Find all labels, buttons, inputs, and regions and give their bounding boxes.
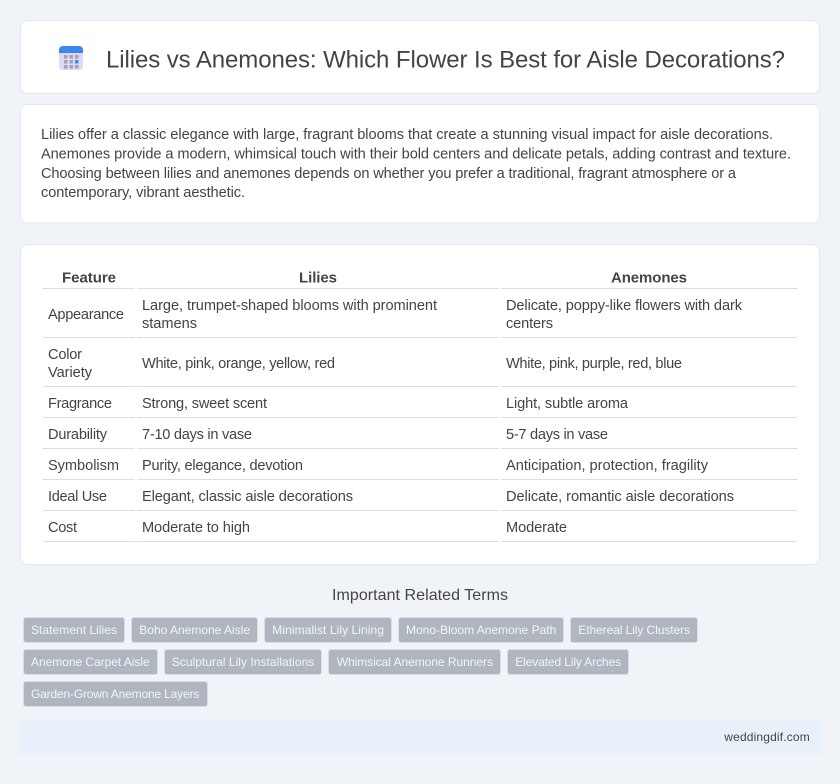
row: appearance: stamens: [142, 316, 197, 332]
row: ideal use: Delicate, romantic aisle decorations: [506, 489, 734, 505]
row: ideal use: Ideal Use: [48, 489, 107, 505]
tag: boho anemone aisle: [132, 618, 258, 642]
row: appearance: [48, 298, 743, 332]
row: cost: Moderate: [506, 520, 567, 536]
title: Lilies vs Anemones: Which Flower Is Best for Aisle Decorations?: [106, 46, 785, 74]
row: ideal use: Elegant, classic aisle decorations: [142, 489, 353, 505]
panel: header: [20, 20, 820, 94]
row: durability: 5-7 days in vase: [506, 427, 608, 443]
tag: mono-bloom anemone path: [398, 618, 564, 642]
tag: statement lilies: Statement Lilies: [31, 623, 117, 637]
row: color variety: [48, 347, 682, 381]
row: durability: Durability: [48, 427, 108, 443]
tag: minimalist lily lining: [264, 618, 392, 642]
row: durability: [48, 427, 608, 443]
panel: introduction text: Choosing between lilies and anemones depends on whether you prefer a traditional, fragrant atmosphere or a: [41, 166, 737, 182]
row: cost: Cost: [48, 520, 77, 536]
row: fragrance: Strong, sweet scent: [142, 396, 267, 412]
row: symbolism: Purity, elegance, devotion: [142, 458, 303, 474]
row: ideal use: [48, 489, 734, 505]
heading: important related terms: Important Related Terms: [332, 587, 508, 604]
tag: elevated lily arches: Elevated Lily Arches: [515, 655, 621, 669]
row: cost: Moderate to high: [142, 520, 250, 536]
tag: ethereal lily clusters: Ethereal Lily Clusters: [578, 623, 690, 637]
row: durability: 7-10 days in vase: [142, 427, 252, 443]
tag: minimalist lily lining: Minimalist Lily Lining: [272, 623, 384, 637]
row: appearance: Large, trumpet-shaped blooms with prominent: [142, 298, 437, 314]
icon: calendar: [59, 46, 83, 70]
table header row: [62, 270, 687, 286]
row: symbolism: [48, 458, 709, 474]
table header row: Anemones: [611, 270, 687, 286]
tag: sculptural lily installations: [164, 650, 322, 674]
tag: whimsical anemone runners: Whimsical Anemone Runners: [337, 655, 493, 669]
tag: boho anemone aisle: Boho Anemone Aisle: [139, 623, 250, 637]
row: fragrance: Fragrance: [48, 396, 112, 412]
row: fragrance: Light, subtle aroma: [506, 396, 629, 412]
row: appearance: Delicate, poppy-like flowers with dark: [506, 298, 743, 314]
row: color variety: White, pink, purple, red, blue: [506, 356, 682, 372]
row: symbolism: Anticipation, protection, fragility: [506, 458, 709, 474]
tag: statement lilies: [24, 618, 124, 642]
panel: introduction text: Lilies offer a classic elegance with large, fragrant blooms that create a stunning visual impact for aisle decorations.: [41, 127, 773, 143]
row: fragrance: [48, 396, 629, 412]
row: appearance: Appearance: [48, 307, 124, 323]
row: appearance: centers: [506, 316, 553, 332]
table header row: Lilies: [299, 270, 337, 286]
panel: related term tags: [24, 618, 698, 706]
tag: elevated lily arches: [508, 650, 628, 674]
panel: introduction text: Anemones provide a modern, whimsical touch with their bold centers and delicate petals, adding contrast and texture.: [41, 146, 791, 162]
row: color variety: Variety: [48, 365, 93, 381]
panel: comparison table: [20, 244, 820, 564]
tag: anemone carpet aisle: Anemone Carpet Aisle: [31, 655, 150, 669]
panel: introduction text: [20, 104, 820, 223]
panel: introduction text: contemporary, vibrant aesthetic.: [41, 185, 245, 201]
row: symbolism: Symbolism: [48, 458, 119, 474]
tag: sculptural lily installations: Sculptural Lily Installations: [172, 655, 314, 669]
tag: whimsical anemone runners: [328, 650, 500, 674]
tag: anemone carpet aisle: [24, 650, 158, 674]
tag: ethereal lily clusters: [570, 618, 698, 642]
footer: weddingdif.com: [723, 730, 810, 744]
footer: [20, 720, 820, 754]
row: color variety: White, pink, orange, yellow, red: [142, 356, 335, 372]
tag: garden-grown anemone layers: Garden-Grown Anemone Layers: [31, 687, 199, 701]
tag: mono-bloom anemone path: Mono-Bloom Anemone Path: [406, 623, 556, 637]
row: color variety: Color: [48, 347, 82, 363]
table header row: Feature: [62, 270, 116, 286]
row: cost: [48, 520, 567, 536]
tag: garden-grown anemone layers: [24, 682, 208, 706]
